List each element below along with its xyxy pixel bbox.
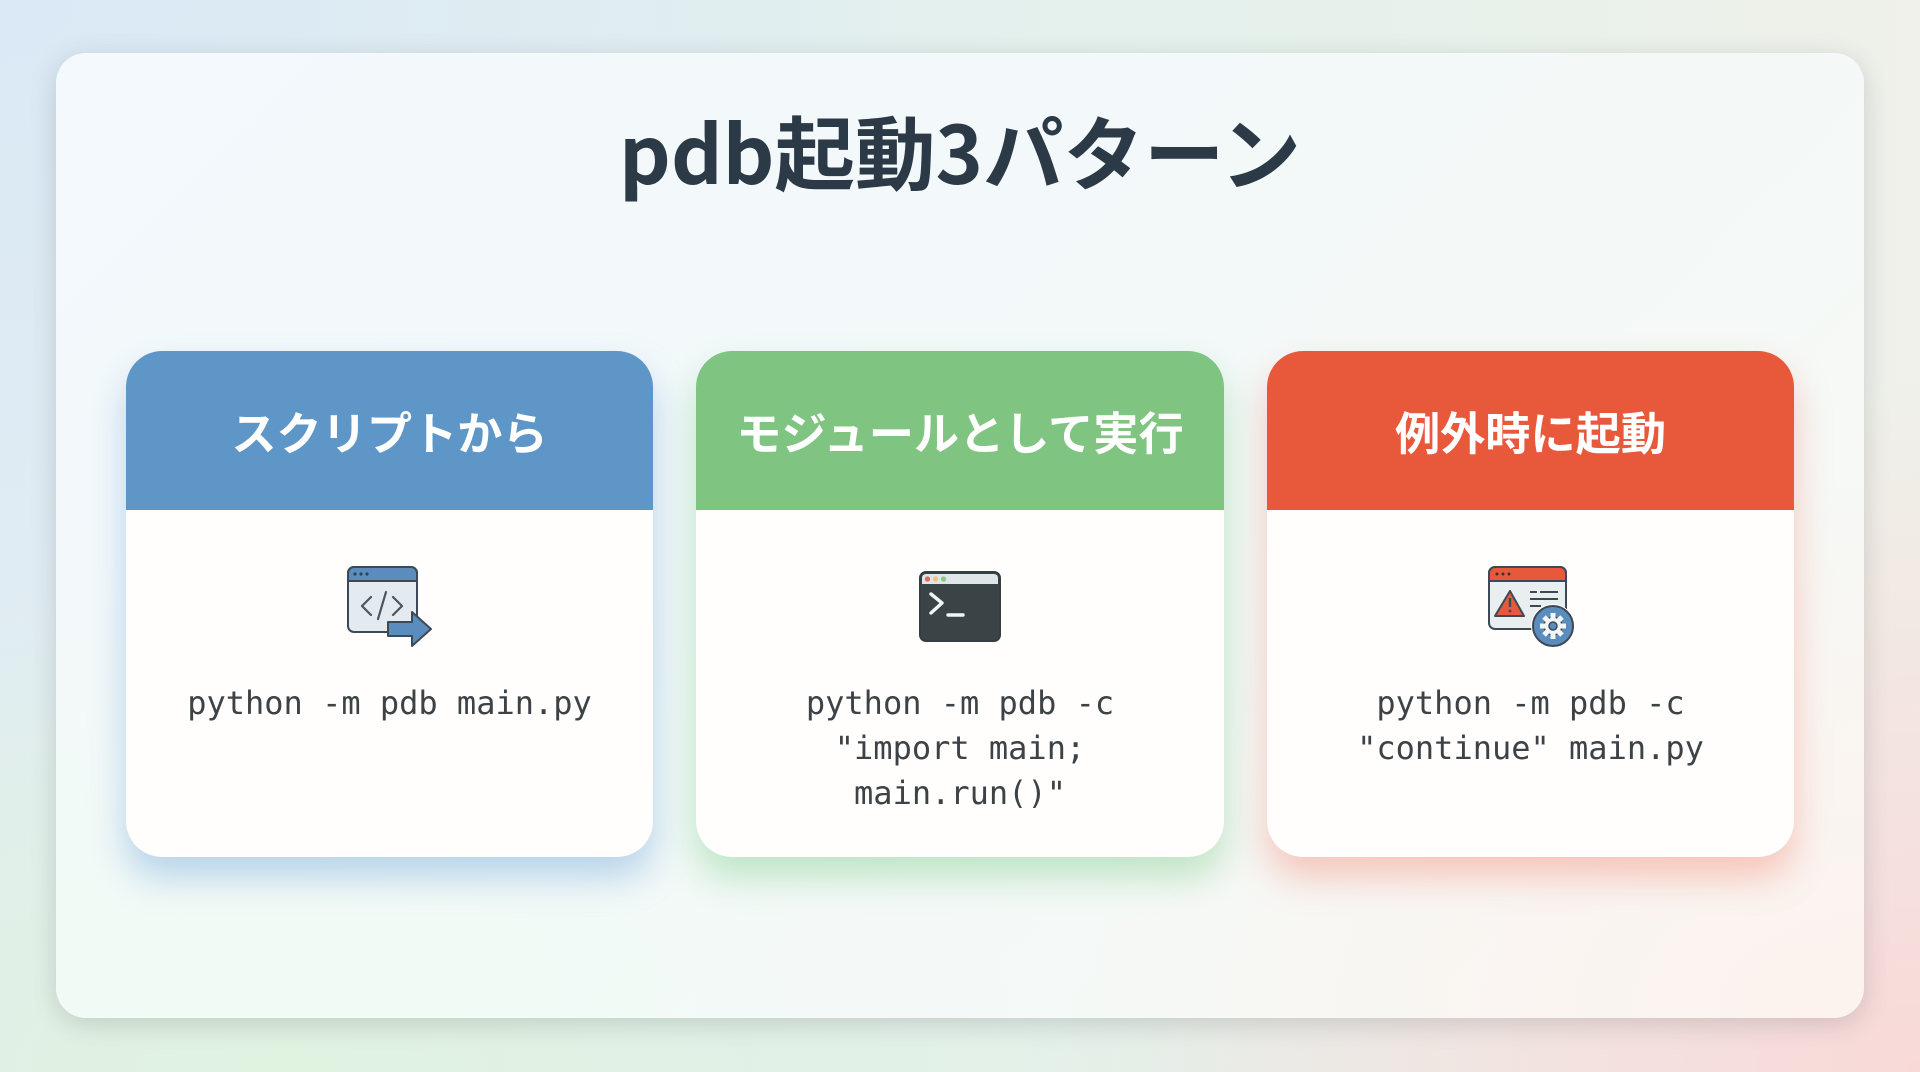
- heading: module: [696, 351, 1224, 510]
- heading: module: モジュールとして実行: [736, 399, 1184, 464]
- icon: terminal window: [919, 571, 1001, 642]
- panel: exception card: [1267, 351, 1794, 857]
- code text: exception: "continue" main.py: [1357, 729, 1704, 767]
- panel: module card: [696, 351, 1224, 857]
- heading: script: スクリプトから: [231, 399, 548, 464]
- code text: module: "import main;: [835, 729, 1085, 767]
- code text: module: main.run()": [854, 774, 1066, 812]
- heading: exception: 例外時に起動: [1395, 399, 1666, 464]
- code text: script: python -m pdb main.py: [187, 684, 592, 722]
- icon: code window with arrow: [347, 566, 432, 647]
- icon: warning window with gear: [1488, 566, 1574, 647]
- title: pdb起動3パターン: [619, 92, 1301, 208]
- code text: module: [806, 684, 1114, 812]
- code text: exception: python -m pdb -c: [1376, 684, 1685, 722]
- code text: module: python -m pdb -c: [806, 684, 1114, 722]
- code text: exception: [1357, 684, 1704, 767]
- heading: exception: [1267, 351, 1794, 510]
- panel: script card: [126, 351, 653, 857]
- heading: script: [126, 351, 653, 510]
